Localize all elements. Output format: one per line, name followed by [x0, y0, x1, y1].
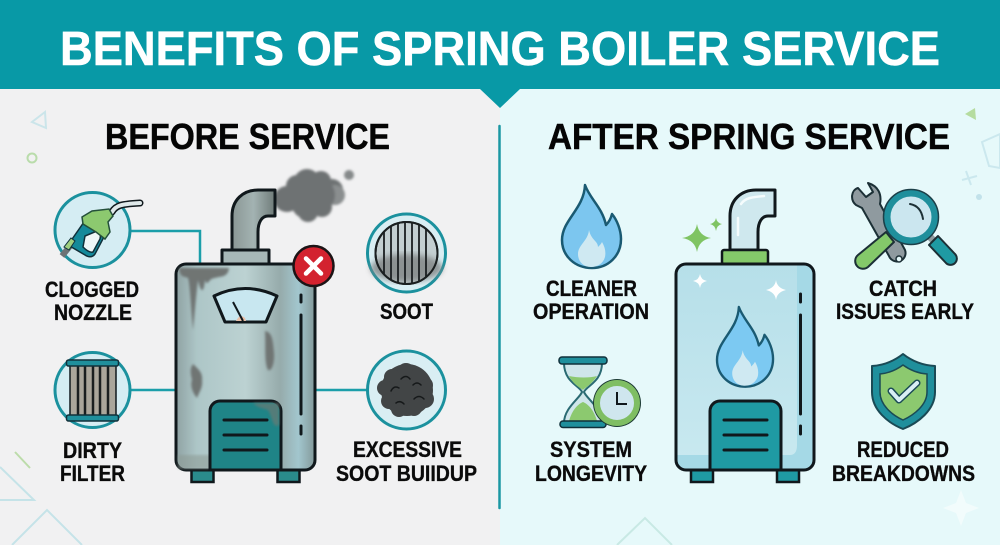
side slot: [799, 294, 802, 434]
panel: after background: [500, 89, 1000, 545]
chimney pipe: [730, 190, 775, 250]
icon: dirty filter: [55, 352, 130, 428]
label: clogged nozzle: NOZZLE: [54, 300, 132, 325]
label: excessive soot buildup: SOOT BUIIDUP: [336, 461, 477, 486]
label: reduced breakdowns: BREAKDOWNS: [832, 461, 975, 486]
icon: hourglass and clock: [559, 357, 641, 428]
label: cleaner operation: OPERATION: [533, 299, 649, 324]
label: reduced breakdowns: REDUCED: [857, 437, 949, 462]
feet: [691, 470, 713, 482]
label: clogged nozzle: [45, 277, 139, 325]
label: catch issues early: ISSUES EARLY: [836, 299, 974, 324]
chimney pipe: [232, 190, 275, 250]
icon: cleaner operation flame: [562, 185, 621, 268]
panel: before background: [0, 89, 500, 545]
label: system longevity: LONGEVITY: [535, 461, 647, 486]
label: cleaner operation: [533, 276, 649, 324]
door: [210, 401, 281, 470]
sparkles: [682, 218, 786, 300]
label: system longevity: SYSTEM: [550, 437, 632, 462]
boiler flame: [717, 307, 773, 387]
divider line: [498, 126, 501, 508]
label: dirty filter: FILTER: [60, 461, 125, 486]
label: reduced breakdowns: [832, 437, 975, 486]
body: [676, 264, 814, 470]
decorative shapes: right panel: [617, 108, 1000, 545]
boiler: clean: [676, 190, 814, 482]
collar: [222, 250, 269, 264]
icon: wrench and magnifier: [852, 183, 957, 269]
body: [176, 264, 315, 470]
label: catch issues early: [836, 276, 974, 324]
label: cleaner operation: CLEANER: [546, 276, 637, 301]
icon: clogged nozzle: [55, 192, 140, 268]
decorative shapes: left panel: [0, 112, 82, 545]
heading: after spring service: AFTER SPRING SERVICE: [548, 116, 950, 157]
icon: red x badge: [294, 246, 334, 286]
gauge: [214, 288, 277, 322]
label: system longevity: [535, 437, 647, 486]
icon: shield: [872, 354, 935, 429]
label: soot: SOOT: [380, 299, 433, 324]
title: BENEFITS OF SPRING BOILER SERVICE: [60, 23, 940, 76]
soot stains: [179, 268, 274, 398]
icon: soot grill: [368, 214, 446, 292]
label: clogged nozzle: CLOGGED: [45, 277, 139, 302]
side slot: [300, 295, 302, 434]
collar: [722, 250, 768, 264]
feet: [192, 470, 214, 482]
boiler: dirty: [176, 169, 354, 482]
heading: before service: BEFORE SERVICE: [105, 116, 390, 157]
header banner: [0, 0, 1000, 108]
rust patch: [178, 455, 210, 469]
label: dirty filter: [60, 438, 125, 486]
label: excessive soot buildup: EXCESSIVE: [353, 437, 462, 462]
label: excessive soot buildup: [336, 437, 477, 486]
label: catch issues early: CATCH: [869, 276, 937, 301]
icon: soot buildup: [368, 351, 446, 429]
smoke: [274, 169, 354, 222]
connector lines: [131, 231, 368, 390]
door: [710, 401, 781, 470]
label: dirty filter: DIRTY: [63, 438, 122, 463]
